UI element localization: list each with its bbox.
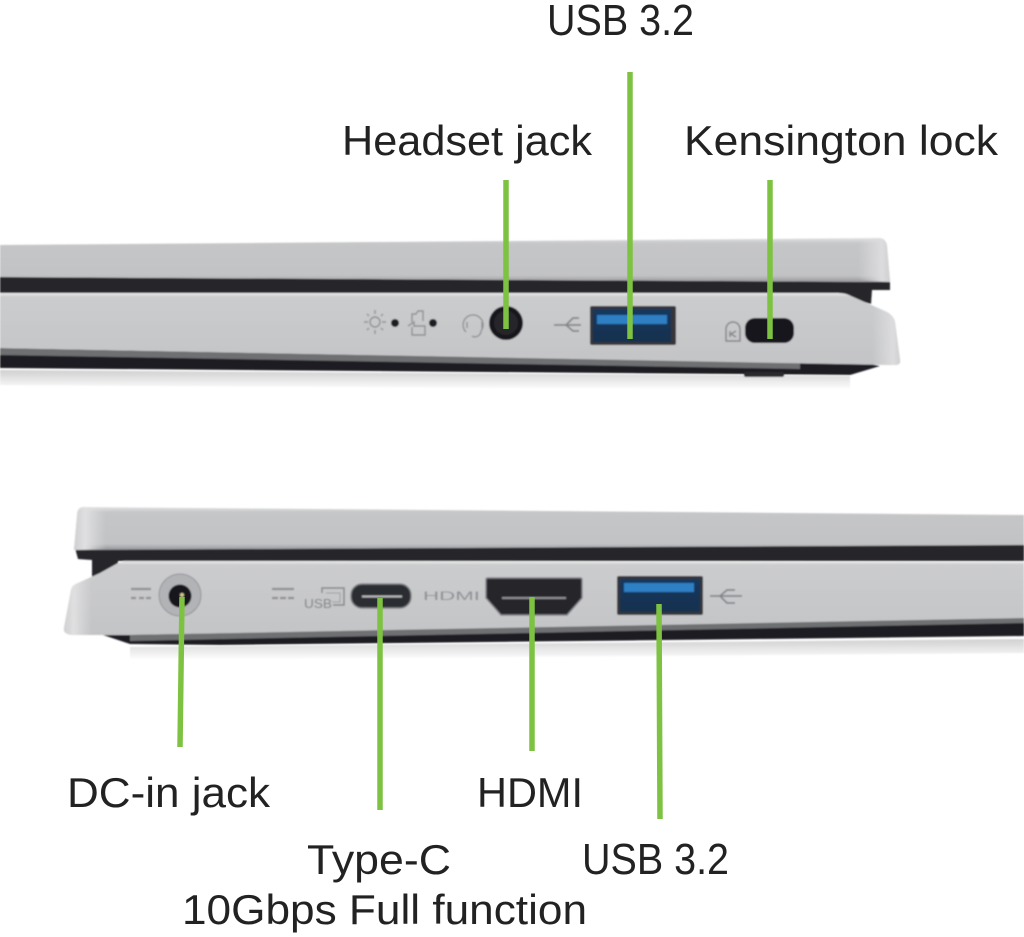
status icons xyxy=(364,310,483,337)
type-c power icon xyxy=(272,589,294,598)
icon: usb left xyxy=(710,590,742,603)
leader: Type-C xyxy=(377,598,383,810)
underside foot xyxy=(744,372,784,377)
laptop: right side view xyxy=(0,238,900,390)
lid end highlight xyxy=(74,507,106,550)
lid xyxy=(0,238,890,282)
leader: USB 3.2 bottom xyxy=(659,604,660,819)
grey bevel xyxy=(130,617,1024,641)
USB 3.2 port left xyxy=(617,576,703,615)
leader: headset jack xyxy=(503,180,509,329)
headset jack port xyxy=(489,306,523,340)
leader: HDMI xyxy=(529,597,535,751)
base xyxy=(0,293,900,365)
base xyxy=(64,561,1024,635)
dark underside xyxy=(100,620,1024,645)
grey bevel xyxy=(0,348,800,369)
leader: DC-in jack xyxy=(180,597,182,747)
leader: kensington lock xyxy=(767,180,773,339)
label: Type-C: Type-C xyxy=(307,836,451,883)
label: USB 3.2 bottom: USB 3.2 xyxy=(582,835,729,884)
dark underside xyxy=(0,350,880,375)
label: Kensington lock: Kensington lock xyxy=(684,117,999,164)
base end highlight xyxy=(872,306,900,365)
usb display icon xyxy=(304,588,344,611)
hinge and dark gap xyxy=(0,277,890,304)
Type-C port xyxy=(351,584,411,608)
USB 3.2 port xyxy=(590,306,676,345)
label: HDMI: HDMI xyxy=(477,769,583,816)
status LEDs xyxy=(391,319,437,327)
icon: usb xyxy=(554,318,581,331)
DC icon xyxy=(131,589,151,598)
HDMI logo: HDMI xyxy=(423,589,480,603)
kensington lock slot xyxy=(745,318,794,343)
leader: USB 3.2 top xyxy=(627,72,633,339)
shadow below left side xyxy=(130,639,1024,660)
green leader lines xyxy=(180,72,770,819)
laptop: left side view xyxy=(64,507,1024,660)
hinge and dark gap xyxy=(75,545,1024,580)
label: DC-in jack: DC-in jack xyxy=(67,769,271,816)
label: 10Gbps Full function: 10Gbps Full function xyxy=(182,886,587,933)
kensington icon xyxy=(726,322,740,341)
base end highlight xyxy=(64,577,92,635)
HDMI port xyxy=(486,578,582,615)
lid end highlight xyxy=(858,238,890,282)
label: Headset jack: Headset jack xyxy=(342,117,593,164)
shadow below right side xyxy=(0,370,850,390)
lid xyxy=(74,507,1024,550)
usb display icon: USB xyxy=(304,596,332,611)
DC jack port xyxy=(159,574,201,616)
